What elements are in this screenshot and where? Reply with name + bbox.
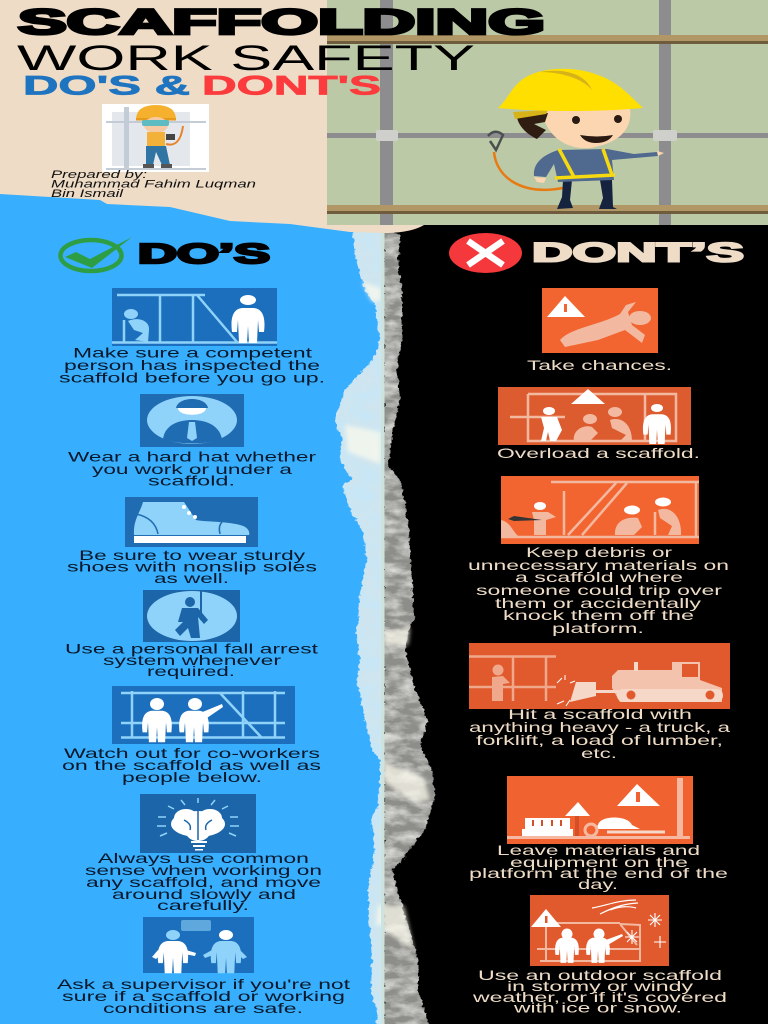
text block: scaffold before you go up. — [59, 370, 325, 386]
text block: as well. — [154, 570, 229, 586]
text block — [59, 344, 325, 386]
icon: debris — [501, 476, 699, 544]
header paper panel — [0, 0, 768, 233]
text block: them or accidentally — [495, 595, 701, 611]
text block — [65, 640, 318, 679]
text block: Wear a hard hat whether — [68, 448, 317, 464]
text block: Use an outdoor scaffold — [478, 967, 722, 983]
text block: Ask a supervisor if you're not — [57, 976, 350, 992]
text block: someone could trip over — [476, 582, 723, 598]
text block: Leave materials and — [497, 842, 700, 858]
prepared by credit: Muhammad Fahim Luqman — [51, 178, 256, 190]
pole clamps — [376, 130, 677, 141]
lanyard — [494, 152, 563, 190]
scaffold planks — [327, 35, 768, 214]
text block: around slowly and — [112, 886, 296, 902]
icon: fall arrest — [143, 590, 240, 642]
hard hat — [498, 69, 643, 111]
face — [541, 108, 630, 148]
heading: do's — [60, 237, 270, 271]
text block: platform. — [552, 620, 644, 636]
lanyard clip — [488, 132, 503, 150]
text block: shoes with nonslip soles — [67, 558, 317, 574]
eyes — [572, 116, 580, 124]
text block — [68, 448, 317, 488]
text block: carefully. — [157, 897, 249, 913]
icon: storm and snow — [530, 895, 669, 966]
subtitle: do's and dont's: DO'S & — [23, 70, 190, 100]
scaffold illustration — [327, 0, 768, 225]
text block: you work or under a — [92, 461, 292, 477]
icon: boot — [125, 497, 258, 547]
text block — [471, 967, 727, 1016]
mouth — [580, 135, 613, 143]
icon: overloaded scaffold — [498, 387, 691, 445]
text block: anything heavy - a truck, a — [469, 719, 730, 735]
icon: brain bulb — [140, 794, 256, 853]
text block: conditions are safe. — [103, 1000, 303, 1016]
hand — [534, 151, 664, 183]
prepared by credit — [51, 169, 256, 200]
text block: unnecessary materials on — [468, 557, 729, 573]
heading: dont's — [449, 233, 744, 273]
hat band — [513, 110, 548, 119]
torn paper highlights — [345, 282, 430, 950]
text block: weather, or if it's covered — [471, 989, 727, 1005]
text block: in stormy or windy — [507, 978, 693, 994]
torn paper strip: grey half — [384, 228, 435, 1024]
icon: falling person — [542, 288, 658, 353]
text block — [57, 976, 350, 1016]
icon: forklift hitting scaffold — [469, 643, 730, 709]
heading: dont's: DONT’S — [532, 238, 744, 268]
worker character — [488, 69, 664, 209]
text block — [62, 745, 321, 785]
text block: system whenever — [103, 652, 282, 668]
text block: person has inspected the — [64, 357, 320, 373]
icon: supervisor talk — [143, 917, 254, 973]
text block: sense when working on — [85, 862, 322, 878]
text block — [469, 706, 730, 761]
scaffold poles — [327, 0, 768, 225]
text block: on the scaffold as well as — [62, 757, 321, 773]
subtitle: do's and dont's: DONT'S — [202, 70, 381, 100]
text block: Hit a scaffold with — [508, 706, 692, 722]
icon: green check — [60, 237, 132, 271]
text block: sure if a scaffold or working — [62, 988, 345, 1004]
text block — [67, 547, 317, 586]
text block: any scaffold, and move — [86, 874, 321, 890]
text block: Overload a scaffold. — [497, 445, 700, 461]
text block — [468, 544, 729, 636]
prepared by credit: Bin Ismail — [51, 188, 124, 200]
icon: co-workers — [112, 686, 295, 744]
text block: equipment on the — [510, 854, 688, 870]
text block: knock them off the — [503, 607, 694, 623]
text block: Take chances. — [527, 357, 672, 373]
text block: Be sure to wear sturdy — [79, 547, 305, 563]
icon: hard hat — [140, 394, 244, 447]
legs — [557, 180, 617, 209]
icon: red x — [449, 233, 522, 273]
text block: etc. — [581, 745, 617, 761]
icon: left materials — [507, 776, 693, 844]
torso and arms — [534, 149, 658, 182]
text block: Use a personal fall arrest — [65, 640, 318, 656]
text block: day. — [578, 876, 618, 892]
heading: do's: DO’S — [138, 238, 270, 269]
text block — [85, 850, 322, 913]
text block: required. — [147, 663, 235, 679]
strip centre fold line — [381, 232, 384, 1024]
text block: Make sure a competent — [73, 344, 312, 360]
text block — [469, 842, 728, 892]
small worker picture — [102, 104, 209, 172]
subtitle: do's and dont's — [23, 70, 381, 100]
title: scaffolding: SCAFFOLDING — [18, 3, 545, 42]
hair — [517, 113, 548, 139]
panel: dont's list — [468, 288, 730, 1016]
text block: people below. — [122, 769, 262, 785]
title: work safety: WORK SAFETY — [17, 39, 475, 78]
text block: forklift, a load of lumber, — [476, 732, 723, 748]
text block: a scaffold where — [515, 569, 683, 585]
text block: with ice or snow. — [512, 1000, 682, 1016]
text block: scaffold. — [148, 472, 235, 488]
background: blue do's side — [0, 190, 382, 1024]
hat ridge — [540, 71, 592, 90]
text block: platform at the end of the — [469, 865, 728, 881]
icon: inspector at scaffold — [112, 288, 277, 346]
text block: Watch out for co-workers — [64, 745, 320, 761]
panel: do's list — [57, 288, 350, 1016]
torn paper strip: light blue half — [335, 230, 384, 1024]
text block: Always use common — [98, 850, 309, 866]
prepared by credit: Prepared by: — [51, 169, 147, 181]
scaffold backdrop — [327, 0, 768, 225]
text block: Keep debris or — [526, 544, 673, 560]
harness — [555, 149, 615, 178]
